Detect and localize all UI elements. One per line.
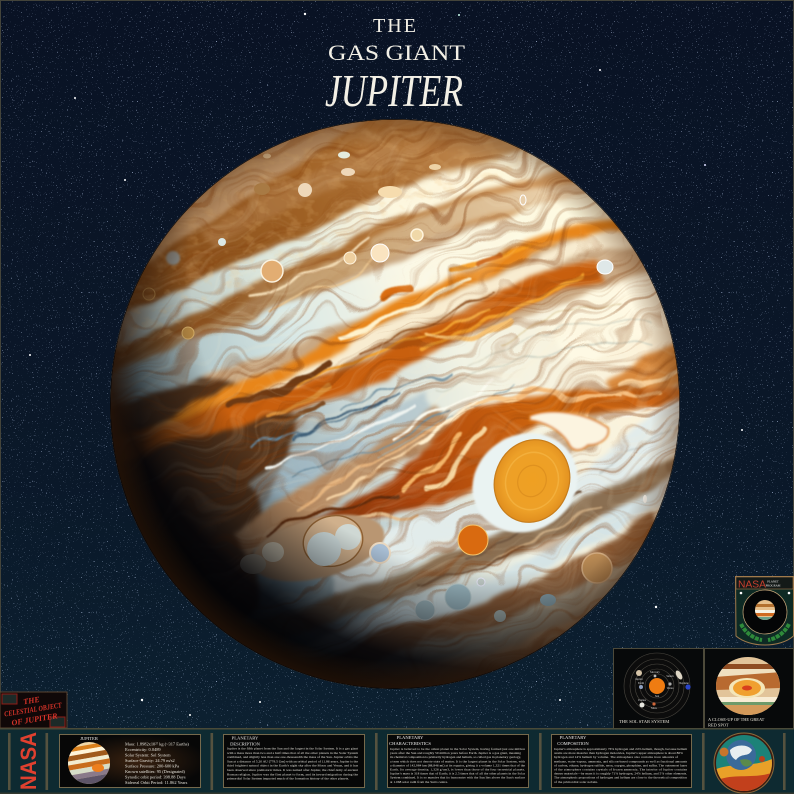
solar system diagram — [624, 653, 690, 719]
lower-left storm cluster — [240, 513, 391, 582]
panel: planetary composition — [552, 734, 692, 788]
characteristics text: years after the Sun and roughly 50 million years before Earth. Jupiter is a gas giant, meaning — [390, 751, 521, 756]
composition text: methane, water vapour, ammonia, and silicon-based compounds as well as fractional amounts — [554, 759, 688, 764]
card: the sol star system: Neptune — [679, 682, 689, 685]
facts list — [125, 742, 189, 785]
panel: planetary characteristics: PLANETARY — [397, 735, 424, 740]
composition text: of carbon, ethane, hydrogen sulfide, neon, oxygen, phosphine, and sulfur. The outermost layer — [554, 763, 688, 768]
card: the sol star system: Mercury — [650, 671, 660, 674]
panel: planetary description — [224, 734, 364, 788]
card: close-up of the great red spot: RED SPOT — [708, 722, 729, 728]
description text: Roman religion. Jupiter was the first planet to form, and its inward migration during the — [227, 772, 358, 777]
composition text: atoms are more massive than hydrogen molecules, Jupiter's upper atmosphere is about 86% — [554, 751, 683, 756]
card: the sol star system — [614, 648, 704, 728]
badge: NASA planet program — [736, 576, 794, 645]
facts list: Mass: 1.8982x10²⁷ kg (~317 Earths) — [125, 742, 189, 746]
characteristics text: a diameter of 142,984 km (88,846 mi) at its equator, giving it a volume 1,321 times that of the — [390, 763, 525, 768]
cloud spots — [143, 152, 647, 622]
composition text: The atmospheric proportions of hydrogen and helium are close to the theoretical composition — [554, 776, 687, 780]
card: close-up of the great red spot — [704, 648, 794, 728]
NASA worm logo: NASA — [16, 732, 41, 790]
facts list: Surface Pressure: 200-600 kPa — [125, 764, 179, 768]
badge: NASA planet program: PROGRAM — [766, 584, 781, 588]
characteristics text: at 1.068 solar radii from the Sun's centre. — [390, 780, 448, 784]
facts list: Known satellites: 95 (Designated) — [125, 769, 185, 774]
Great Red Spot — [494, 439, 570, 523]
close-up image — [715, 657, 781, 715]
composition text: Jupiter's atmosphere is approximately 76% hydrogen and 24% helium, though, because helium — [554, 747, 687, 752]
composition text: of the atmosphere contains crystals of frozen ammonia. The interior of Jupiter contains — [554, 768, 688, 772]
fine marbled texture: dark and light — [120, 120, 680, 648]
white cloud beside the spot — [530, 412, 608, 450]
facts list: Sidereal Orbit Period: 11.862 Years — [125, 780, 188, 785]
mottled surface in the northern region — [144, 130, 529, 338]
composition text: denser materials—by mass it is roughly 71% hydrogen, 24% helium, and 5% other elements. — [554, 772, 687, 777]
title — [325, 15, 466, 116]
title line: JUPITER: JUPITER — [325, 65, 463, 116]
characteristics text: System combined. It is so massive that its barycenter with the Sun lies above the Sun's surface — [390, 776, 525, 780]
facts list: Surface Gravity: 24.79 m/s2 — [125, 758, 175, 763]
description text: with a mass more than two and a half times that of all the other planets in the Solar System — [227, 751, 358, 755]
composition text — [554, 747, 688, 784]
description text: been observed since prehistoric times. It was named after Jupiter, the chief deity of ancient — [227, 768, 358, 773]
characteristics text: a term which does not denote state of matter. It is the largest planet in the Solar System, with — [390, 759, 525, 764]
warm tint over the northern hemisphere — [150, 120, 524, 282]
panel: Jupiter facts: JUPITER — [80, 736, 99, 741]
characteristics text — [390, 747, 526, 784]
characteristics text: Jupiter is believed to be the oldest planet in the Solar System, having formed just one million — [390, 747, 525, 752]
card: the sol star system: Sun — [655, 695, 660, 698]
panel: planetary composition: PLANETARY — [560, 735, 587, 740]
characteristics text: Earth. Its average density, 1,326 g/cm3, is lower than those of the four terrestrial planets. — [390, 768, 525, 772]
bottom information strip — [0, 728, 794, 794]
card: the sol star system: Jupiter — [635, 678, 643, 681]
panel: planetary composition: COMPOSITION — [557, 741, 589, 746]
Great Red Spot halo — [470, 432, 578, 534]
composition text: of the primordial solar nebula. — [554, 780, 598, 784]
sign: the celestial object — [0, 692, 67, 728]
panel: planetary characteristics: CHARACTERISTICS — [389, 741, 431, 746]
description text: combined, and slightly less than one one-thousandth the mass of the Sun. Jupiter orbits the — [227, 755, 358, 760]
panel: planetary characteristics — [388, 734, 528, 788]
card: the sol star system: THE SOL STAR SYSTEM — [619, 719, 669, 724]
description text: primordial Solar System impacted much of the formation history of the other planets. — [227, 777, 349, 781]
sign: the celestial object: OF JUPITER — [11, 711, 59, 727]
facts list: Solar System: Sol System — [125, 752, 171, 758]
facts list: Synodic orbit period: 398.88 Days — [125, 774, 186, 780]
badge planet — [755, 600, 775, 620]
badge: NASA planet program: PLANET — [767, 580, 779, 584]
characteristics text: Jupiter's mass is 318 times that of Earth; it is 2.5 times that of all the other planets in the Solar — [390, 772, 526, 776]
description text: third brightest natural object in the Earth's night sky after the Moon and Venus, and it has — [227, 764, 359, 769]
description text — [227, 746, 359, 781]
card: the sol star system: Earth — [638, 682, 645, 685]
sign: the celestial object: THE — [23, 695, 40, 706]
card: the sol star system: Mars — [651, 707, 657, 710]
mini Jupiter — [68, 742, 110, 784]
small red oval — [458, 525, 488, 555]
title line: THE: THE — [373, 15, 416, 37]
round emblem: Earth and planets — [714, 733, 774, 793]
composition text: hydrogen and 14% helium by volume. The atmosphere also contains trace amounts of — [554, 755, 679, 759]
description text: Sun at a distance of 5.20 AU (778.5 Gm) with an orbital period of 11.86 years. Jupiter is the — [227, 759, 358, 763]
planet limb darkening — [110, 119, 680, 689]
turbulent cloud streaks — [230, 242, 680, 580]
panel: Jupiter facts — [57, 734, 200, 792]
card: the sol star system: Venus — [667, 687, 673, 690]
planet night-side shading — [110, 214, 639, 689]
panel: planetary description: PLANETARY — [232, 736, 259, 740]
card: close-up of the great red spot: A CLOSE-UP OF THE GREAT — [708, 717, 765, 722]
panel: planetary description: DESCRIPTION — [230, 742, 261, 746]
card: the sol star system: Uranus — [638, 699, 646, 702]
badge laurel — [741, 624, 789, 640]
planet: Jupiter — [110, 119, 680, 689]
title line: GAS GIANT: GAS GIANT — [328, 40, 466, 65]
badge: NASA planet program: NASA — [738, 578, 766, 590]
characteristics text: its chemical composition is primarily hydrogen and helium, so called gas in planetary geology, — [390, 755, 521, 760]
card: the sol star system: Saturn — [666, 675, 674, 678]
facts list: Eccentricity: 0.0489 — [125, 747, 161, 752]
planet base colour — [100, 110, 700, 710]
sign: the celestial object: CELESTIAL OBJECT — [4, 700, 63, 718]
description text: Jupiter is the fifth planet from the Sun and the largest in the Solar System. It is a gas giant — [227, 746, 358, 750]
atmospheric bands — [110, 119, 680, 688]
